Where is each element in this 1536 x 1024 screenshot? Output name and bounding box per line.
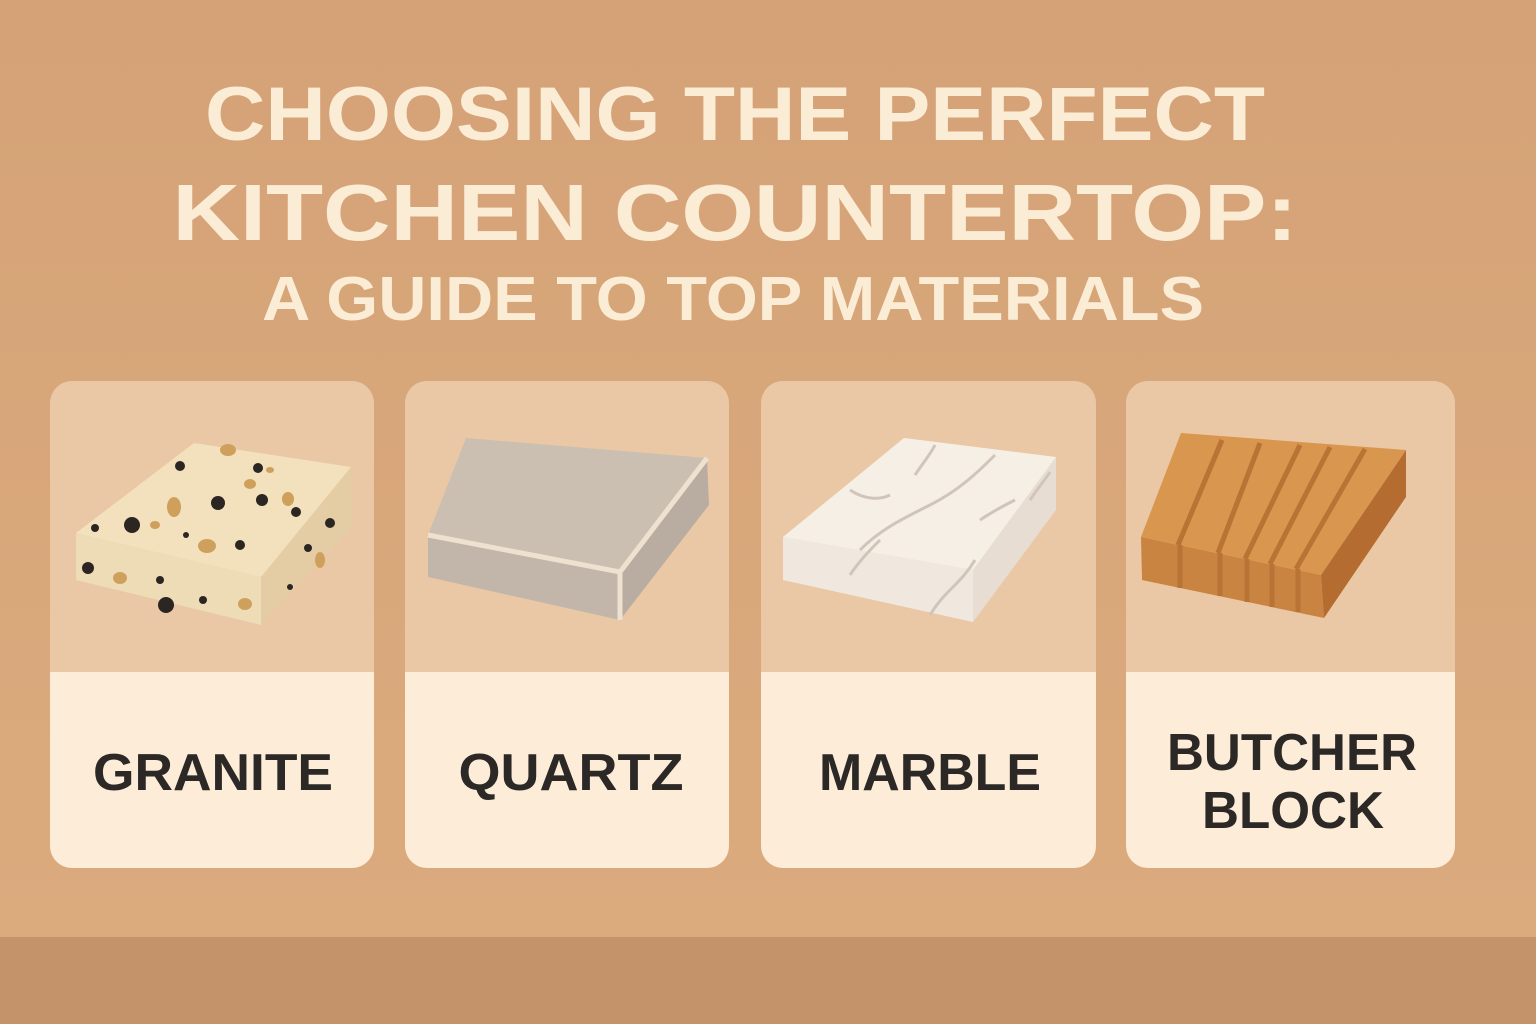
title: KITCHEN COUNTERTOP:	[172, 168, 1298, 257]
title: CHOOSING THE PERFECT	[205, 72, 1265, 157]
floor band	[0, 937, 1536, 1024]
label: butcher block: BLOCK	[1202, 782, 1384, 840]
panel: butcher block	[1126, 381, 1455, 868]
title: A GUIDE TO TOP MATERIALS	[262, 265, 1204, 334]
label: granite: GRANITE	[93, 744, 333, 802]
panel: granite	[50, 381, 374, 868]
icon: granite slab	[76, 443, 352, 625]
icon: wood block	[1141, 433, 1406, 618]
panel: marble	[761, 381, 1096, 868]
icon: marble slab	[783, 438, 1056, 622]
panel: quartz	[405, 381, 729, 868]
title	[172, 72, 1298, 334]
label: marble: MARBLE	[819, 744, 1041, 802]
label: quartz: QUARTZ	[458, 744, 684, 802]
label: butcher block	[1167, 724, 1417, 840]
icon: quartz slab	[428, 438, 709, 620]
label: butcher block: BUTCHER	[1167, 724, 1417, 782]
